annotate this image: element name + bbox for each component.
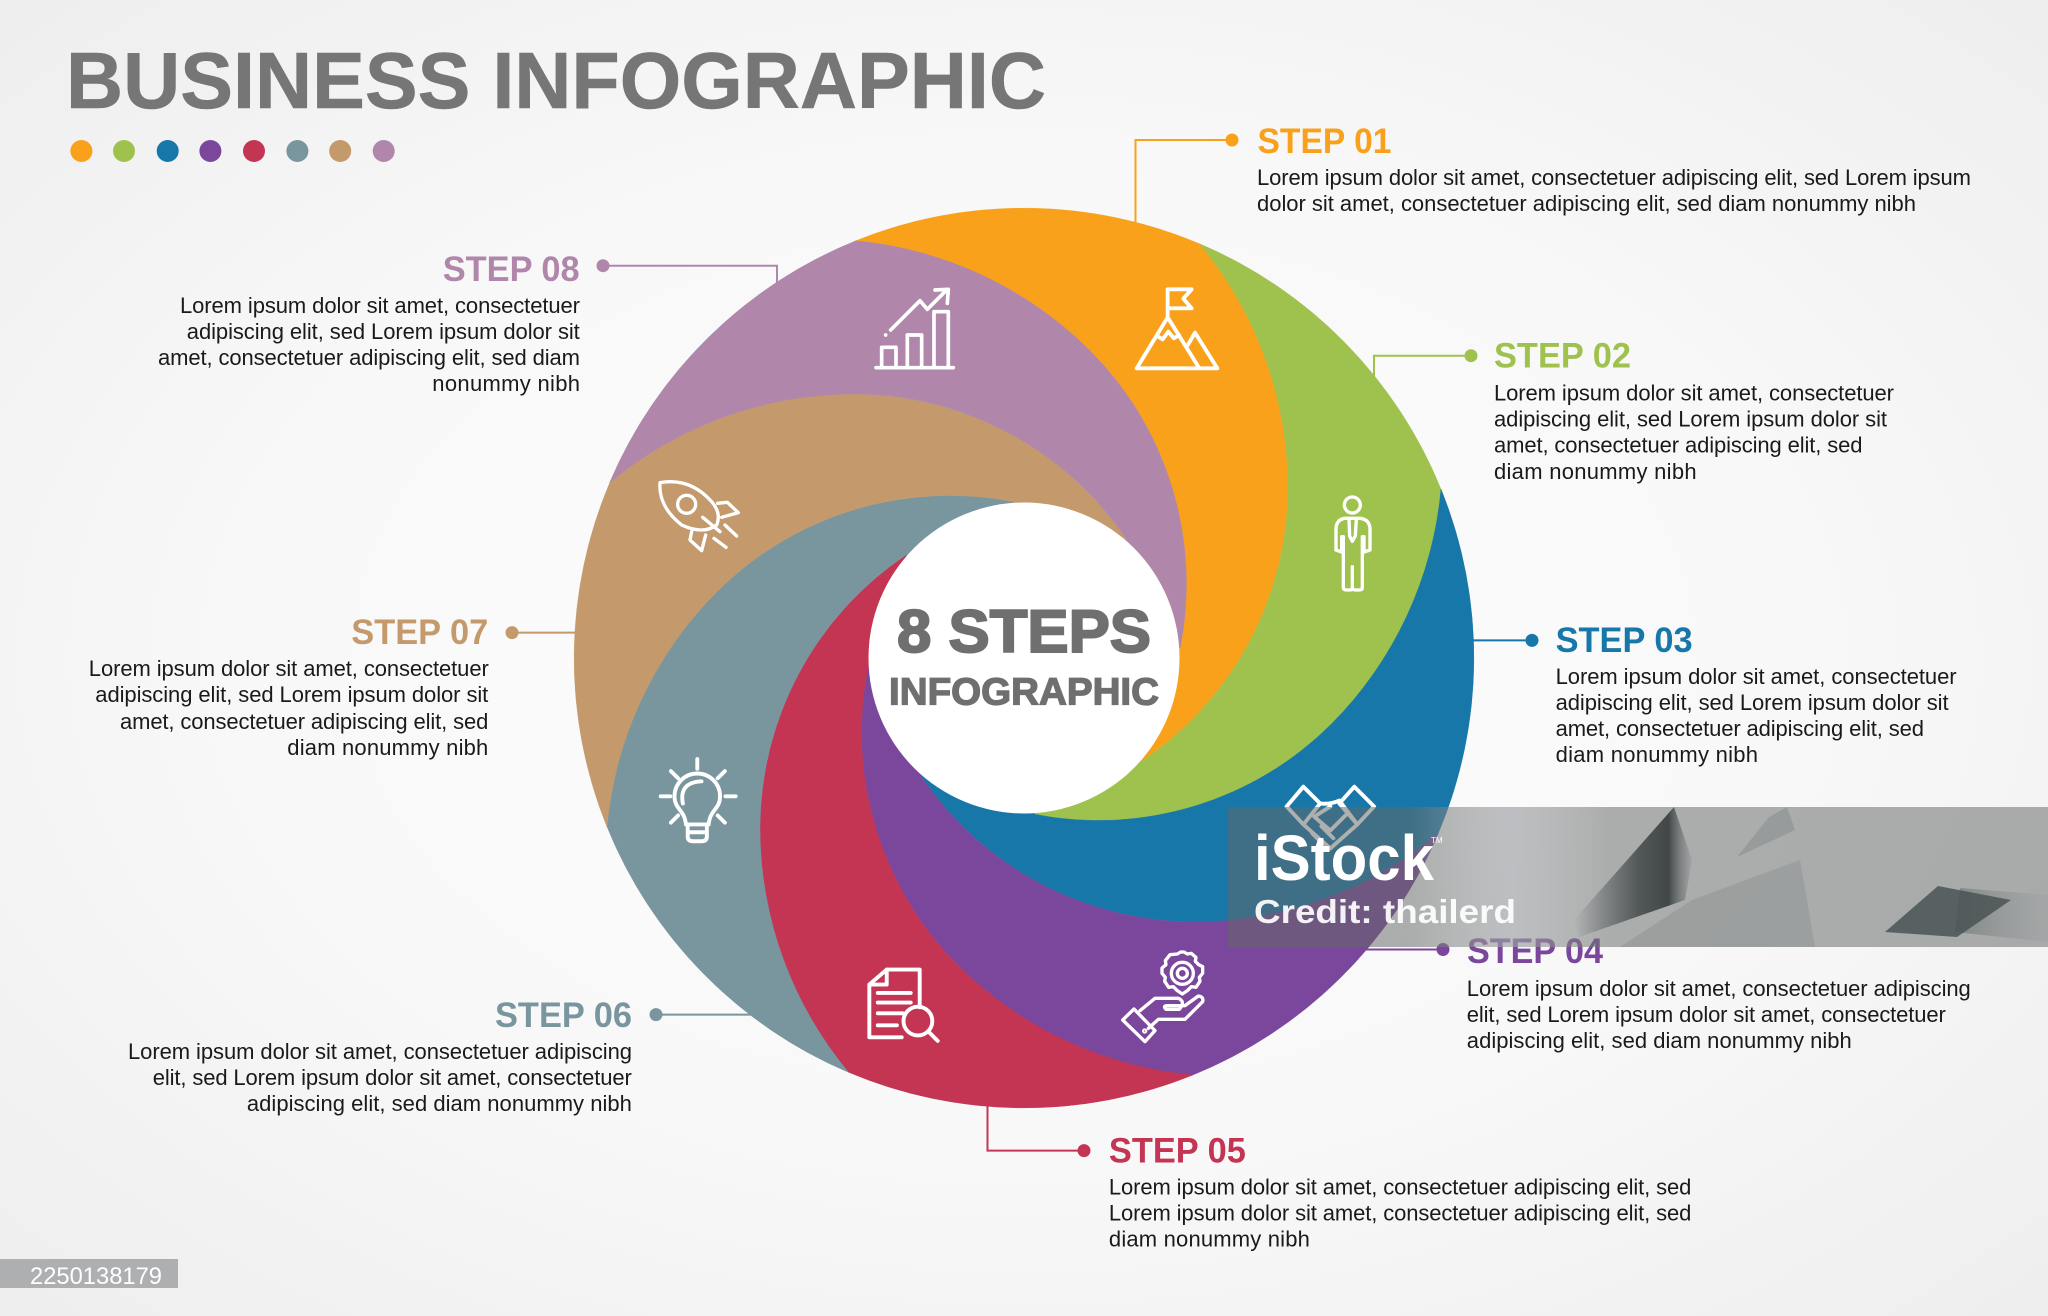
body: adipiscing elit, sed Lorem ipsum dolor sit <box>95 682 488 707</box>
step 04 text <box>1467 932 1971 1053</box>
connector: step 06 <box>650 1009 755 1020</box>
body: Lorem ipsum dolor sit amet, consectetuer <box>1556 664 1957 689</box>
body: diam nonummy nibh <box>1494 459 1697 484</box>
blade: step 01 orange <box>855 208 1288 761</box>
connector: step 01 <box>1136 134 1238 222</box>
body <box>158 293 580 396</box>
trademark sign: TM <box>1431 836 1443 845</box>
body: adipiscing elit, sed Lorem ipsum dolor sit <box>1556 690 1949 715</box>
blade: step 06 slate <box>519 398 1216 1096</box>
connector: step 05 <box>988 1100 1090 1156</box>
icon: hand holding gear <box>1123 952 1203 1042</box>
icon: person <box>1336 497 1370 590</box>
heading: STEP 08 <box>443 250 580 289</box>
body <box>128 1039 632 1116</box>
body: Lorem ipsum dolor sit amet, consectetuer adipiscing elit, sed Lorem ipsum <box>1257 165 1971 190</box>
icon: document with magnifier <box>869 970 938 1041</box>
body <box>89 656 489 760</box>
icon: light bulb <box>661 759 736 841</box>
body <box>1109 1174 1691 1252</box>
blade: step 07 tan <box>574 394 1127 827</box>
body: nonummy nibh <box>432 371 580 396</box>
image id tag <box>0 1259 178 1290</box>
connector: step 03 <box>1470 635 1538 646</box>
body: amet, consectetuer adipiscing elit, sed diam <box>158 345 580 370</box>
body: elit, sed Lorem ipsum dolor sit amet, consectetuer <box>153 1065 632 1090</box>
watermark logo: iStock <box>1254 822 1434 894</box>
icon: rocket <box>660 482 738 551</box>
connector: step 07 <box>506 627 580 638</box>
body: adipiscing elit, sed Lorem ipsum dolor sit <box>187 319 580 344</box>
step 05 text <box>1109 1132 1691 1252</box>
icon: handshake <box>1287 787 1374 848</box>
step 02 text <box>1494 336 1894 484</box>
body: amet, consectetuer adipiscing elit, sed <box>1556 716 1924 741</box>
step 01 text <box>1257 122 1971 216</box>
body: Lorem ipsum dolor sit amet, consectetuer adipiscing <box>128 1039 632 1064</box>
heading: STEP 03 <box>1556 621 1693 660</box>
step 07 text <box>89 613 489 760</box>
connector: step 02 <box>1374 350 1476 380</box>
blade: step 08 mauve <box>586 153 1284 850</box>
watermark credit: Credit: thailerd <box>1254 893 1516 930</box>
blade: step 05 red <box>760 555 1193 1108</box>
centre white circle <box>868 502 1180 814</box>
heading: STEP 06 <box>495 996 632 1035</box>
centre heading: 8 STEPS <box>897 598 1151 665</box>
body: Lorem ipsum dolor sit amet, consectetuer adipiscing elit, sed <box>1109 1174 1691 1200</box>
body: elit, sed Lorem ipsum dolor sit amet, consectetuer <box>1467 1002 1946 1027</box>
blade: step 04 purple <box>764 466 1462 1163</box>
title: BUSINESS INFOGRAPHIC <box>66 36 1046 125</box>
centre subheading: INFOGRAPHIC <box>889 672 1159 714</box>
connector: step 04 <box>1360 944 1448 955</box>
body: Lorem ipsum dolor sit amet, consectetuer <box>89 656 489 681</box>
step 08 text <box>158 250 580 396</box>
blade: step 02 green <box>832 220 1529 918</box>
body <box>1556 664 1957 767</box>
step 03 text <box>1556 621 1957 767</box>
heading: STEP 05 <box>1109 1132 1246 1171</box>
heading: STEP 04 <box>1467 932 1604 971</box>
body <box>1467 976 1971 1053</box>
body <box>1257 165 1971 216</box>
image id tag: 2250138179 <box>30 1263 162 1290</box>
body: amet, consectetuer adipiscing elit, sed <box>120 709 488 734</box>
colour dot legend <box>70 140 395 162</box>
body: Lorem ipsum dolor sit amet, consectetuer <box>180 293 580 318</box>
body: Lorem ipsum dolor sit amet, consectetuer adipiscing elit, sed <box>1109 1201 1691 1226</box>
body: adipiscing elit, sed Lorem ipsum dolor sit <box>1494 407 1887 432</box>
heading: STEP 07 <box>351 613 488 652</box>
connector: step 08 <box>598 260 777 286</box>
heading: STEP 01 <box>1258 122 1392 161</box>
body: diam nonummy nibh <box>287 735 488 760</box>
body: diam nonummy nibh <box>1109 1227 1310 1252</box>
centre label <box>889 598 1159 714</box>
body: dolor sit amet, consectetuer adipiscing elit, sed diam nonummy nibh <box>1257 191 1916 216</box>
blade: step 03 blue <box>921 489 1474 922</box>
body: adipiscing elit, sed diam nonummy nibh <box>247 1091 632 1116</box>
body: amet, consectetuer adipiscing elit, sed <box>1494 433 1862 458</box>
body: diam nonummy nibh <box>1556 742 1758 767</box>
heading: STEP 02 <box>1494 336 1631 376</box>
step 06 text <box>128 996 632 1116</box>
pinwheel chart <box>519 153 1529 1163</box>
icon: mountain with flag <box>1137 289 1217 368</box>
body <box>1494 380 1894 484</box>
stock watermark banner <box>1228 807 2048 947</box>
body: Lorem ipsum dolor sit amet, consectetuer <box>1494 380 1894 406</box>
body: adipiscing elit, sed diam nonummy nibh <box>1467 1028 1852 1053</box>
icon: growth chart <box>876 289 953 368</box>
body: Lorem ipsum dolor sit amet, consectetuer adipiscing <box>1467 976 1971 1001</box>
